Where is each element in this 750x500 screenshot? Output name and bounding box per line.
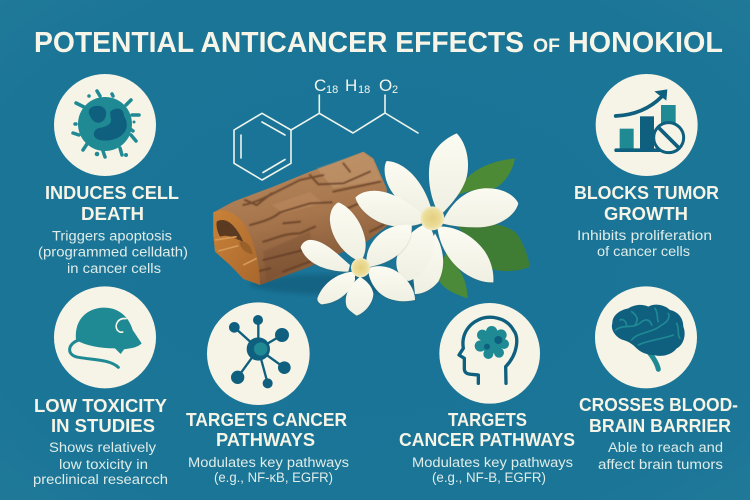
panel: targets cancer pathways (network) xyxy=(186,302,349,485)
heading: BLOCKS TUMOR xyxy=(574,183,719,203)
heading xyxy=(579,395,738,436)
heading: TARGETS xyxy=(448,410,527,430)
leaves xyxy=(437,158,530,298)
description: Modulates key pathways xyxy=(412,455,573,470)
panel: low toxicity xyxy=(33,286,168,487)
large flower xyxy=(355,133,518,294)
panel: crosses blood-brain barrier xyxy=(579,286,738,472)
small flower stamen xyxy=(351,258,370,277)
description: in cancer cells xyxy=(67,261,161,276)
heading xyxy=(34,396,167,436)
description xyxy=(38,228,188,276)
heading xyxy=(399,410,575,450)
description: preclinical researcch xyxy=(33,472,168,487)
description xyxy=(188,455,349,485)
panel: targets cancer pathways (head) xyxy=(399,303,575,485)
illustration: magnolia bark and flowers xyxy=(213,133,530,316)
description xyxy=(598,440,723,472)
heading: PATHWAYS xyxy=(216,430,315,450)
description: Shows relatively xyxy=(49,440,156,455)
heading: CROSSES BLOOD- xyxy=(579,395,738,415)
chemical structure: honokiol formula: C xyxy=(314,76,326,95)
large flower stamen xyxy=(420,206,444,230)
panel: blocks tumor growth xyxy=(574,74,719,259)
description: Triggers apoptosis xyxy=(52,228,172,244)
icon: damaged cell xyxy=(54,74,156,176)
chemical structure: honokiol formula: 2 xyxy=(392,84,398,96)
description: of cancer cells xyxy=(597,244,690,259)
title: HONOKIOL xyxy=(568,27,723,59)
bark xyxy=(213,152,388,285)
heading: DEATH xyxy=(81,204,144,224)
description: affect brain tumors xyxy=(598,457,723,472)
heading: BRAIN BARRIER xyxy=(589,416,731,436)
heading: LOW TOXICITY xyxy=(34,396,167,416)
heading: CANCER PATHWAYS xyxy=(399,430,575,450)
title: POTENTIAL ANTICANCER EFFECTS xyxy=(34,27,524,59)
description: (e.g., NF-κB, EGFR) xyxy=(214,470,333,485)
description: Able to reach and xyxy=(608,440,723,455)
icon: bar chart with prohibition sign xyxy=(596,74,698,176)
chemical structure: honokiol formula xyxy=(234,76,418,180)
chemical structure: honokiol formula: 18 xyxy=(358,84,370,96)
description: low toxicity in xyxy=(59,457,148,472)
description: Inhibits proliferation xyxy=(577,228,712,243)
heading: INDUCES CELL xyxy=(45,183,179,203)
icon: head with tumor xyxy=(439,303,540,404)
heading: GROWTH xyxy=(604,204,688,224)
heading xyxy=(186,410,347,450)
description xyxy=(33,440,168,487)
panel: induces cell death xyxy=(38,74,188,276)
small flower xyxy=(301,202,415,316)
description xyxy=(412,455,573,485)
chemical structure: honokiol formula: H xyxy=(345,76,357,95)
chemical structure: honokiol formula: O xyxy=(379,76,392,95)
icon: mouse xyxy=(54,286,156,388)
chemical structure: honokiol formula: 18 xyxy=(326,84,338,96)
description xyxy=(577,228,712,259)
heading xyxy=(574,183,719,224)
description: Modulates key pathways xyxy=(188,455,349,470)
icon: brain xyxy=(595,286,697,388)
icon: molecular network xyxy=(207,302,310,405)
title: OF xyxy=(533,36,560,57)
heading: IN STUDIES xyxy=(51,416,155,436)
description: (e.g., NF-B, EGFR) xyxy=(432,470,546,485)
heading xyxy=(45,183,179,224)
description: (programmed celldath) xyxy=(38,244,188,260)
heading: TARGETS CANCER xyxy=(186,410,347,430)
